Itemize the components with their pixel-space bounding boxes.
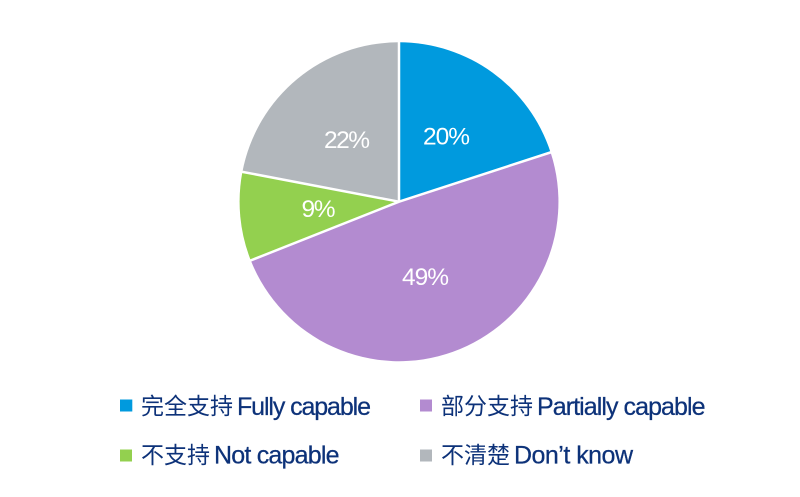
value label: 22%: 22% bbox=[324, 127, 370, 154]
legend item: fully capable bbox=[120, 393, 371, 421]
slice: fully capable 20% bbox=[399, 42, 551, 202]
pie chart bbox=[240, 41, 558, 361]
legend item: fully capable: 完全支持 bbox=[141, 393, 233, 419]
legend item: not capable bbox=[120, 442, 340, 470]
slice: don't know 22% bbox=[242, 42, 399, 202]
legend item: don't know: 不清楚 bbox=[441, 442, 510, 468]
legend item: not capable: Not capable bbox=[214, 442, 340, 470]
slice: not capable 9% bbox=[240, 172, 399, 260]
legend item: partially capable bbox=[420, 393, 706, 421]
legend item: not capable: 不支持 bbox=[141, 442, 210, 468]
legend item: don't know bbox=[420, 442, 634, 470]
slice: partially capable 49% bbox=[251, 152, 558, 361]
legend item: partially capable: 部分支持 bbox=[441, 393, 533, 419]
value label: 9%: 9% bbox=[302, 196, 336, 223]
legend item: partially capable: Partially capable bbox=[537, 393, 706, 421]
value label: 49%: 49% bbox=[402, 264, 449, 291]
legend item: fully capable: Fully capable bbox=[237, 393, 371, 421]
legend bbox=[120, 393, 706, 470]
value label: 20%: 20% bbox=[423, 124, 470, 150]
legend item: don't know: Don’t know bbox=[514, 442, 634, 470]
slice separators bbox=[241, 41, 552, 261]
